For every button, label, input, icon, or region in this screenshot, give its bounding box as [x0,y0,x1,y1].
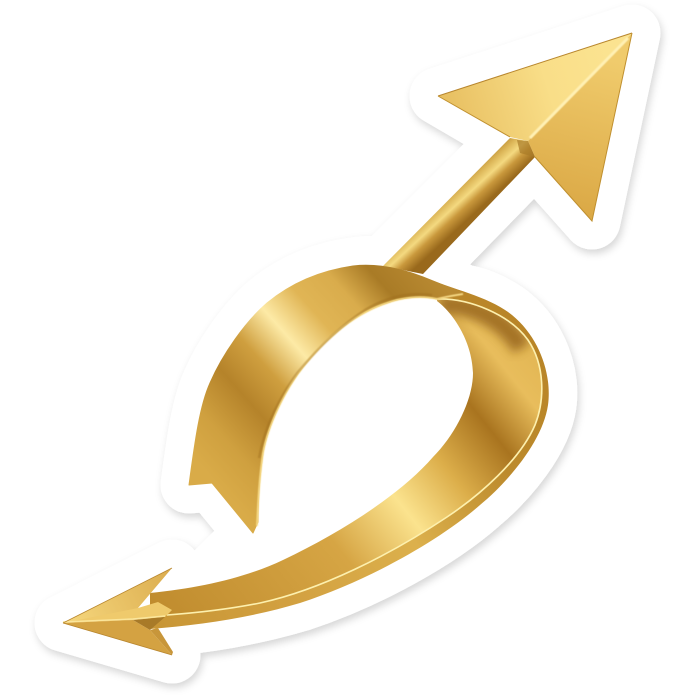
ribbon back surface and tail [150,299,542,617]
upper arrowhead [438,33,632,221]
ribbon front band [189,265,463,533]
lower arrowhead [63,568,173,655]
sticker outline [63,33,632,655]
upper shaft [383,138,535,274]
ribbon outer rim [150,277,549,629]
